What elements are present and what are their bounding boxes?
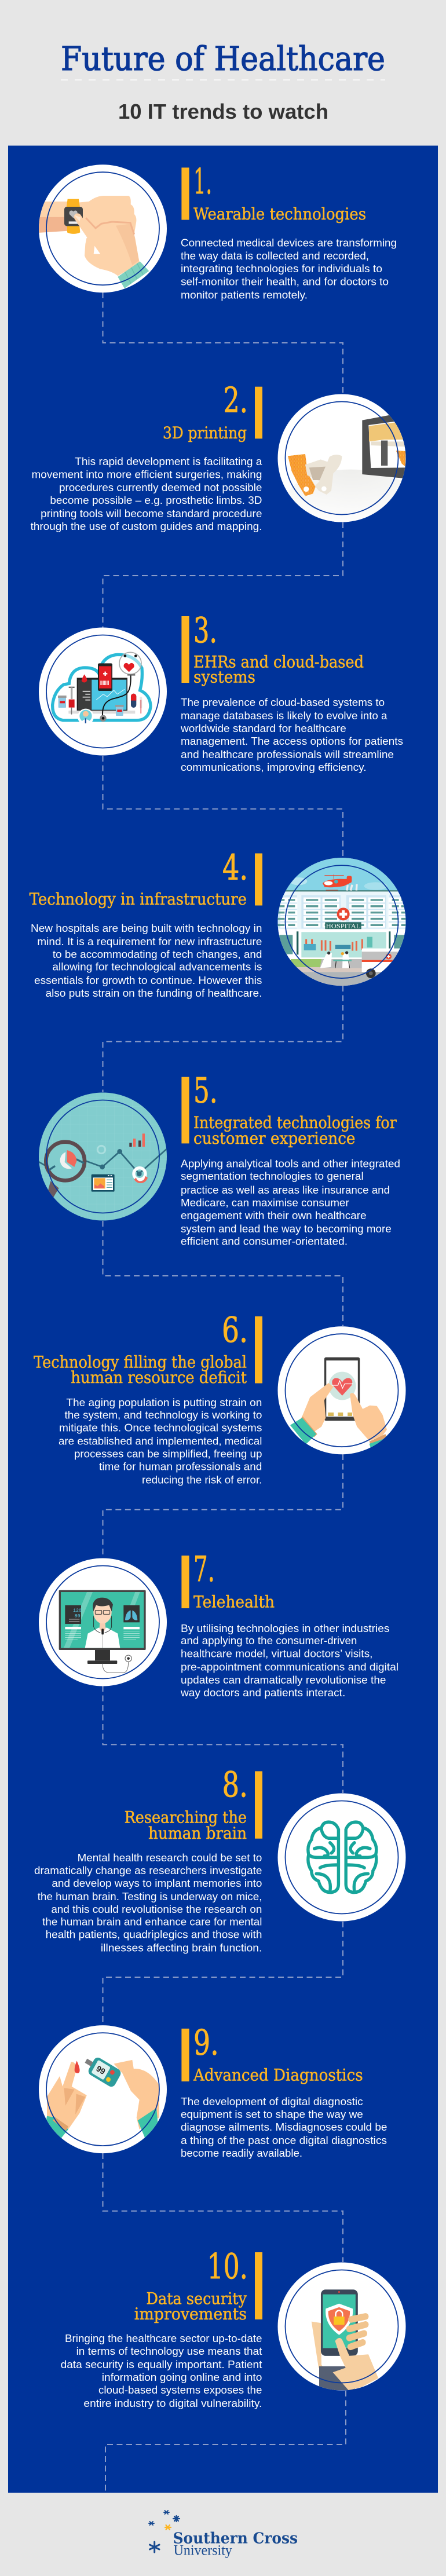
text block: the human brain. Testing is underway on mice, bbox=[38, 1890, 262, 1902]
heading: Wearable technologies bbox=[193, 204, 366, 224]
accent bar bbox=[255, 2252, 262, 2319]
text block: mitigate this. Once technological systems bbox=[59, 1422, 262, 1434]
icon: 3D printer and pelvis bbox=[278, 394, 405, 522]
text block: management. The access options for patients bbox=[181, 735, 403, 747]
text block: cloud-based systems exposes the bbox=[98, 2384, 262, 2396]
panel: trend 4 technology in infrastructure bbox=[30, 848, 410, 999]
heading bbox=[134, 2289, 247, 2323]
number: 8. bbox=[222, 1765, 248, 1805]
text block bbox=[59, 1396, 262, 1485]
text block: self-monitor their health, and for doctors to bbox=[181, 276, 389, 288]
panel: trend 8 researching the human brain bbox=[34, 1765, 405, 1954]
heading: Integrated technologies for bbox=[193, 1113, 397, 1132]
text block: equipment is set to shape the way we bbox=[181, 2108, 363, 2120]
icon: southern cross stars bbox=[149, 2511, 180, 2552]
text block: printing tools will become standard procedure bbox=[41, 507, 262, 519]
icon: hand tapping smartwatch bbox=[38, 164, 167, 292]
text block bbox=[181, 1157, 400, 1247]
text block: and this could revolutionise the research on bbox=[51, 1903, 262, 1915]
heading: human brain bbox=[148, 1824, 247, 1843]
text block: through the use of custom guides and mapping. bbox=[31, 520, 262, 532]
text block bbox=[180, 696, 403, 773]
text block: and develop ways to implant memories into bbox=[52, 1877, 262, 1889]
icon: hospital building bbox=[278, 858, 405, 986]
text block: New hospitals are being built with technology in bbox=[31, 922, 262, 934]
heading bbox=[34, 1352, 247, 1387]
text block bbox=[181, 237, 397, 301]
text block: engagement with their own healthcare bbox=[181, 1209, 367, 1221]
text block bbox=[180, 1622, 399, 1699]
number: 7. bbox=[193, 1549, 215, 1590]
text block: pre-appointment communications and digital bbox=[181, 1660, 399, 1673]
number: 4. bbox=[222, 848, 248, 888]
text block: Bringing the healthcare sector up-to-date bbox=[65, 2332, 262, 2344]
text block: become readily available. bbox=[181, 2147, 302, 2159]
logo: Southern Cross University bbox=[149, 2511, 298, 2559]
heading: customer experience bbox=[193, 1129, 356, 1148]
text block: are established and implemented, medical bbox=[59, 1435, 262, 1447]
heading: improvements bbox=[134, 2304, 247, 2323]
text block: reducing the risk of error. bbox=[142, 1473, 262, 1485]
text block: entire industry to digital vulnerability. bbox=[83, 2397, 262, 2409]
text block: The development of digital diagnostic bbox=[181, 2095, 363, 2107]
text block: diagnose ailments. Misdiagnoses could be bbox=[181, 2121, 387, 2133]
text block: Mental health research could be set to bbox=[78, 1851, 262, 1864]
dashed connector path between trends bbox=[103, 292, 346, 2493]
accent bar bbox=[181, 167, 189, 220]
heading: Researching the bbox=[125, 1808, 247, 1827]
text block: manage databases is likely to evolve into a bbox=[181, 709, 387, 722]
text block: Applying analytical tools and other integrated bbox=[181, 1157, 400, 1169]
number: 3. bbox=[193, 610, 217, 651]
subtitle: 10 IT trends to watch bbox=[118, 100, 328, 123]
accent bar bbox=[181, 616, 189, 683]
text block: practice as well as areas like insurance and bbox=[181, 1184, 390, 1196]
text block: also puts strain on the funding of healthcare. bbox=[46, 987, 262, 999]
icon: glucose meter and hands: 99 bbox=[95, 2063, 107, 2076]
icon: hospital building: HOSPITAL bbox=[326, 923, 361, 930]
text block: and applying to the consumer-driven bbox=[181, 1634, 357, 1646]
text block: information going online and into bbox=[102, 2371, 262, 2383]
text block: By utilising technologies in other industries bbox=[181, 1622, 389, 1634]
panel: trend 1 wearable technologies bbox=[38, 162, 397, 301]
heading: Telehealth bbox=[193, 1593, 275, 1612]
panel: trend 5 integrated technologies bbox=[35, 1070, 400, 1247]
wordmark: Southern Cross bbox=[173, 2530, 298, 2547]
text block bbox=[31, 455, 262, 532]
heading: Advanced Diagnostics bbox=[193, 2066, 363, 2085]
icon: doctor on monitor: 120 bbox=[73, 1608, 82, 1613]
heading bbox=[193, 652, 364, 687]
text block: the way data is collected and recorded, bbox=[181, 250, 369, 262]
heading: EHRs and cloud-based bbox=[193, 652, 364, 672]
panel: trend 10 data security improvements bbox=[61, 2246, 406, 2409]
heading: Data security bbox=[146, 2289, 247, 2308]
number: 1. bbox=[193, 162, 212, 202]
text block: the human brain and enhance care for mental bbox=[42, 1916, 262, 1928]
panel: trend 6 human resource deficit bbox=[34, 1310, 405, 1485]
icon: doctor on monitor bbox=[39, 1558, 167, 1686]
heading bbox=[125, 1808, 247, 1843]
accent bar bbox=[181, 1077, 189, 1143]
accent bar bbox=[181, 2029, 189, 2081]
text block: in terms of technology use means that bbox=[76, 2345, 262, 2357]
text block: essentials for growth to continue. However this bbox=[34, 974, 262, 986]
text block: This rapid development is facilitating a bbox=[75, 455, 262, 467]
number: 5. bbox=[193, 1070, 218, 1111]
text block: become possible – e.g. prosthetic limbs. 3D bbox=[50, 494, 262, 506]
panel: trend 7 telehealth bbox=[39, 1549, 399, 1699]
wordmark line 2: University bbox=[174, 2543, 232, 2559]
icon: glucose meter and hands bbox=[39, 2025, 167, 2153]
heading: 3D printing bbox=[163, 423, 247, 442]
text block: mind. It is a requirement for new infrastructure bbox=[37, 935, 262, 947]
accent bar bbox=[181, 1556, 189, 1608]
text block: illnesses affecting brain function. bbox=[101, 1942, 262, 1954]
text block: movement into more efficient surgeries, making bbox=[31, 469, 262, 481]
heading: Technology in infrastructure bbox=[30, 890, 247, 909]
number: 2. bbox=[224, 380, 248, 420]
text block: procedures currently deemed not possible bbox=[59, 481, 262, 493]
text block: and healthcare professionals will streamline bbox=[181, 748, 394, 760]
text block: integrating technologies for individuals to bbox=[181, 262, 382, 275]
accent bar bbox=[255, 387, 262, 438]
text block: a thing of the past once digital diagnostics bbox=[181, 2134, 387, 2146]
text block: allowing for technological advancements is bbox=[52, 961, 262, 973]
text block bbox=[61, 2332, 262, 2409]
icon: analytics chart with magnifier bbox=[39, 1092, 167, 1221]
text block: The aging population is putting strain on bbox=[66, 1396, 262, 1408]
icon: doctor on monitor: 80 bbox=[75, 1613, 81, 1619]
text block: health patients, quadriplegics and those with bbox=[46, 1929, 262, 1941]
accent bar bbox=[255, 854, 262, 906]
number: 10. bbox=[207, 2246, 248, 2287]
text block: processes can be simplified, freeing up bbox=[74, 1448, 262, 1459]
text block: data security is equally important. Patient bbox=[61, 2358, 262, 2370]
text block bbox=[31, 922, 262, 999]
text block: Medicare, can maximise consumer bbox=[181, 1196, 349, 1209]
heading: Technology filling the global bbox=[34, 1352, 247, 1371]
text block: time for human professionals and bbox=[99, 1461, 262, 1472]
text block: system and lead the way to becoming more bbox=[181, 1223, 392, 1235]
text block: worldwide standard for healthcare bbox=[180, 722, 346, 734]
text block: efficient and consumer-orientated. bbox=[181, 1235, 348, 1247]
text block: way doctors and patients interact. bbox=[180, 1686, 345, 1699]
text block bbox=[181, 2095, 387, 2159]
accent bar bbox=[255, 1771, 262, 1839]
text block: healthcare model, virtual doctors’ visits, bbox=[181, 1647, 372, 1659]
text block: Connected medical devices are transforming bbox=[181, 237, 397, 249]
text block bbox=[34, 1851, 262, 1954]
heading: systems bbox=[193, 667, 255, 687]
panel: trend 2 3D printing bbox=[31, 380, 414, 532]
text block: communications, improving efficiency. bbox=[181, 761, 367, 773]
text block: dramatically change as researchers investigate bbox=[34, 1864, 262, 1876]
text block: to be accommodating of tech changes, and bbox=[53, 948, 262, 960]
heading: human resource deficit bbox=[71, 1368, 247, 1387]
icon: phone with security shield bbox=[278, 2262, 405, 2391]
text block: the system, and technology is working to bbox=[65, 1409, 262, 1421]
heading bbox=[193, 1113, 397, 1148]
number: 6. bbox=[222, 1310, 248, 1351]
text block: monitor patients remotely. bbox=[181, 288, 308, 301]
text block: updates can dramatically revolutionise the bbox=[181, 1674, 386, 1686]
accent bar bbox=[255, 1316, 262, 1383]
text block: segmentation technologies to general bbox=[181, 1170, 364, 1182]
number: 9. bbox=[193, 2023, 219, 2063]
panel: trend 3 EHRs and cloud-based systems bbox=[39, 610, 403, 773]
title: Future of Healthcare bbox=[61, 40, 385, 78]
icon: brain bbox=[278, 1793, 405, 1922]
icon: hands holding phone with heart bbox=[278, 1326, 405, 1454]
panel: trend 9 advanced diagnostics bbox=[39, 2023, 387, 2159]
text block: The prevalence of cloud-based systems to bbox=[181, 696, 385, 708]
icon: medical cloud with laptop bbox=[39, 628, 167, 755]
